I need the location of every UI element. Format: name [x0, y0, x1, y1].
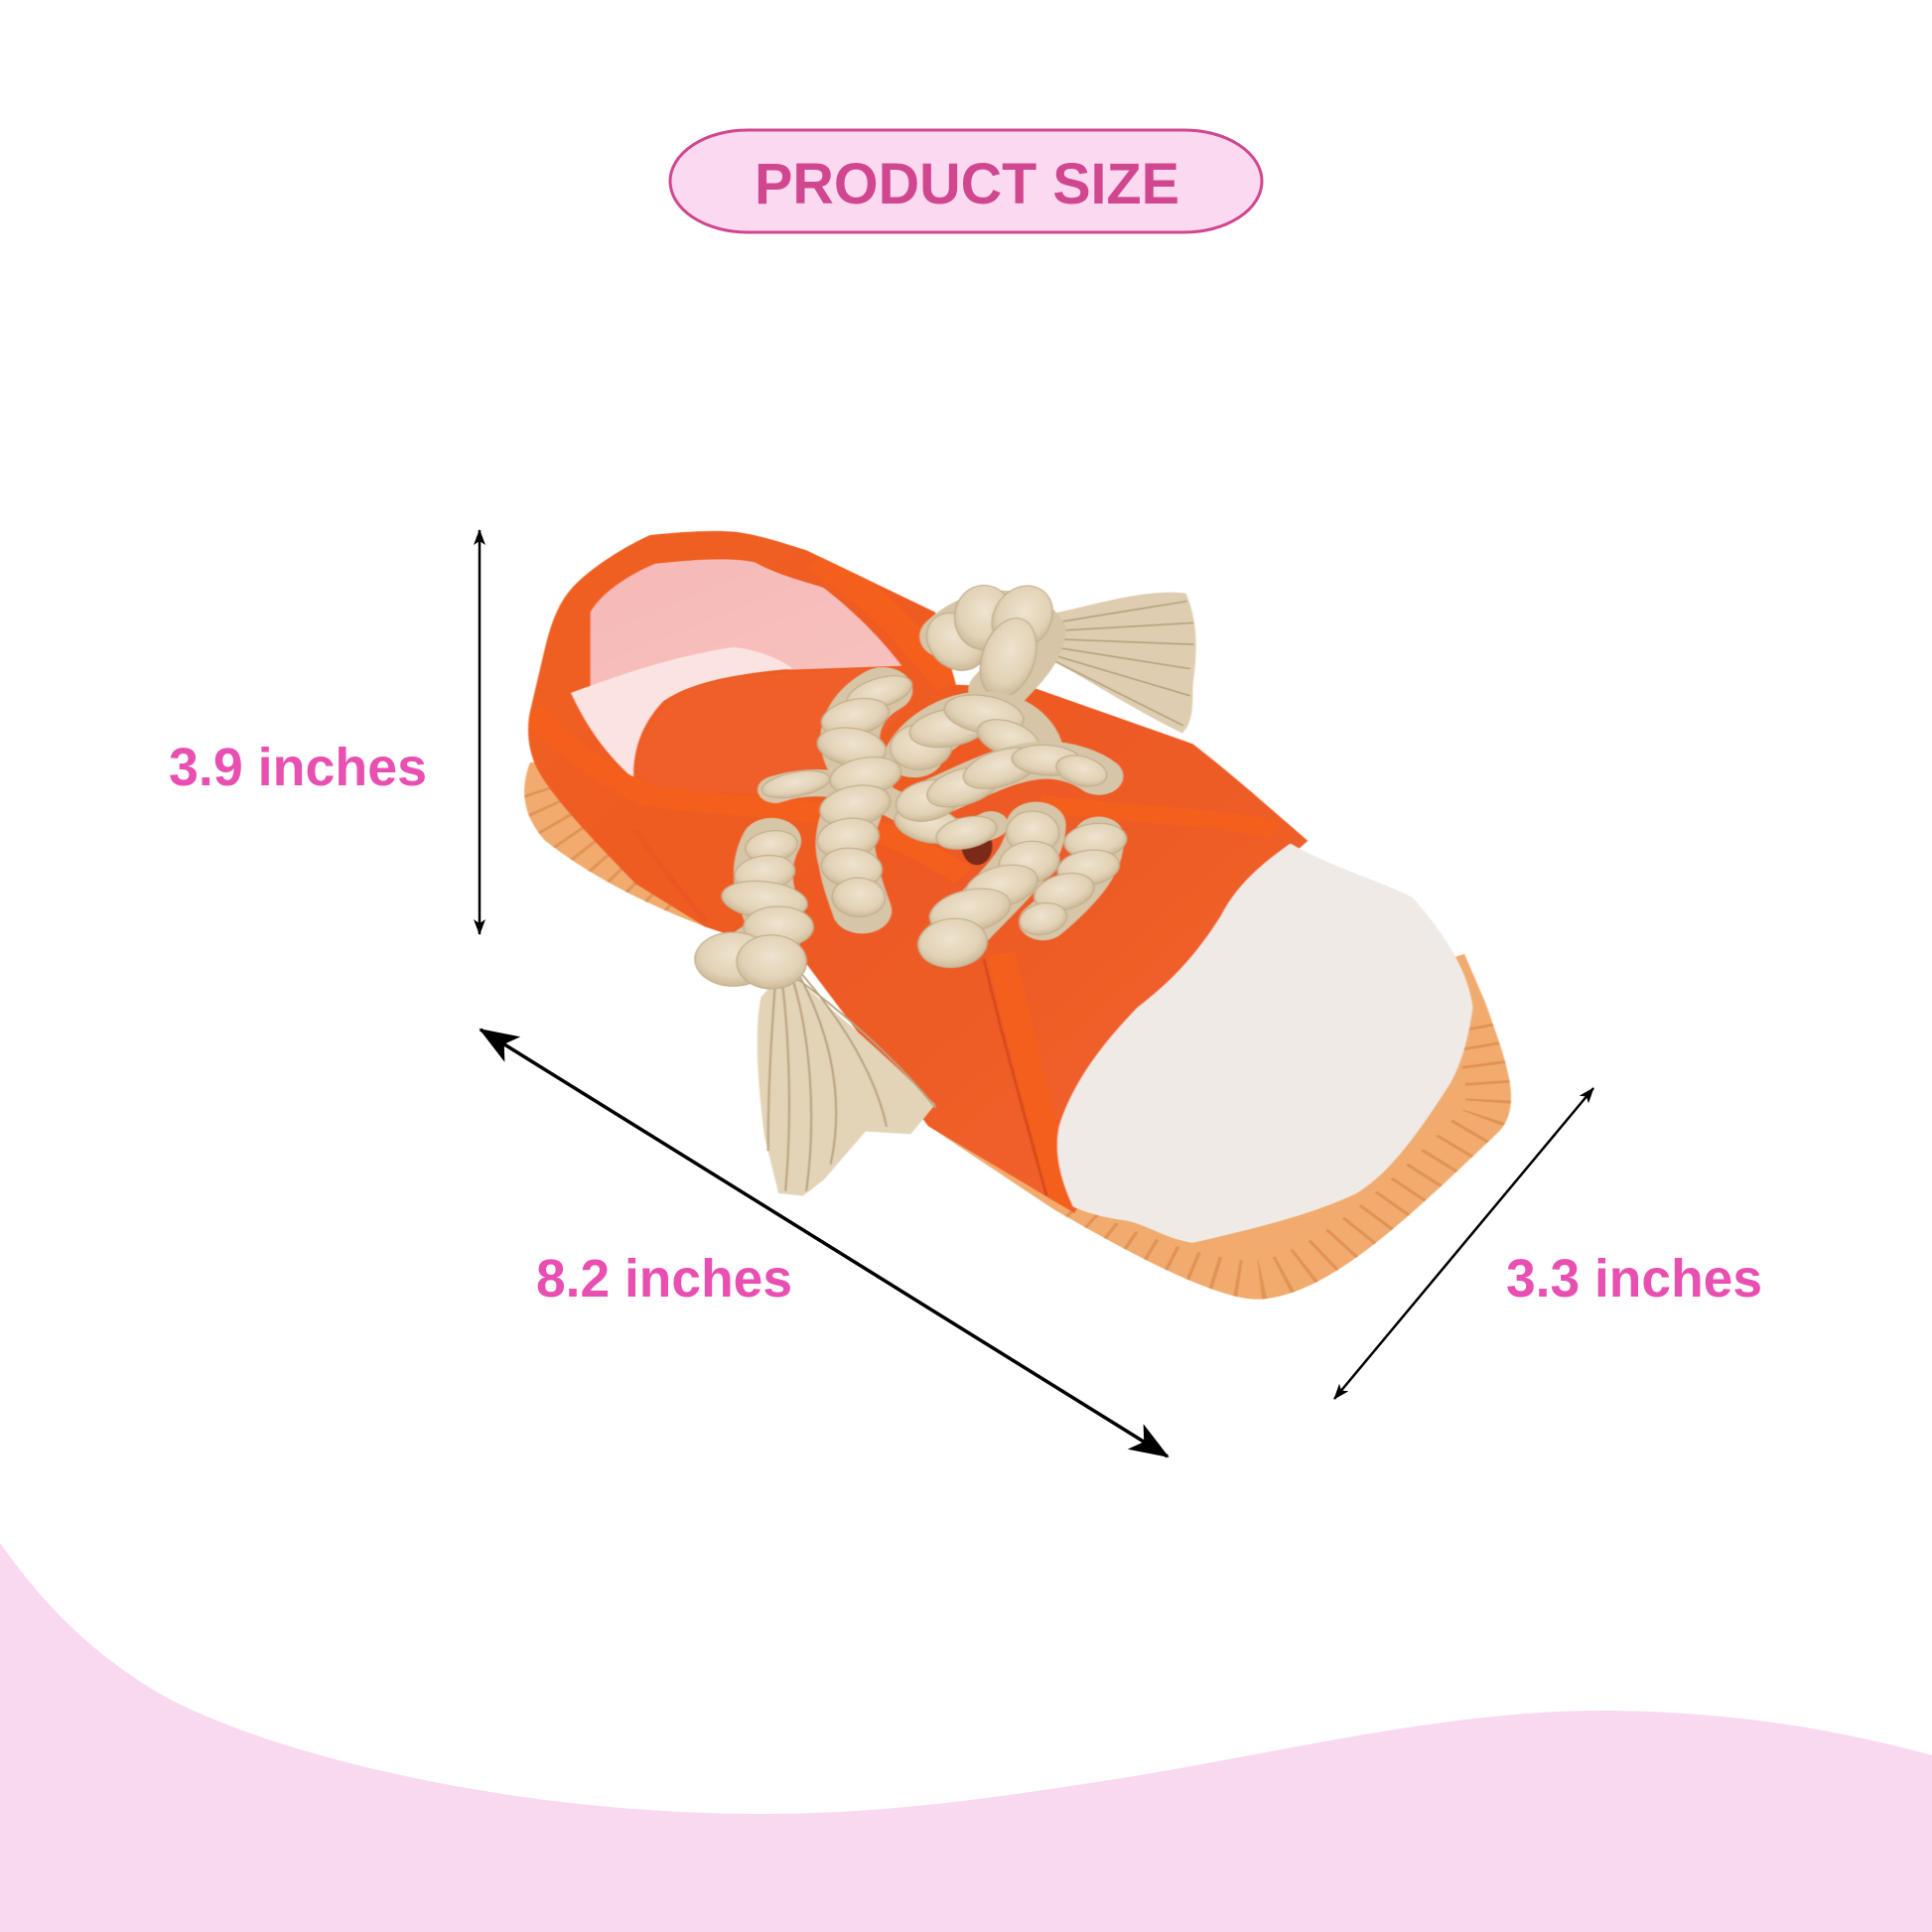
rope crossing lower [888, 740, 1113, 829]
lower left tassel [758, 970, 935, 1196]
shoe bindings [531, 561, 1277, 1206]
right rope pair [909, 811, 1130, 975]
label: length: 8.2 inches [536, 1249, 792, 1309]
width arrow [1334, 1088, 1593, 1399]
vertical rope [810, 669, 918, 921]
title pill [670, 130, 1262, 232]
shoe sole front [928, 954, 1511, 1300]
rope crossing upper [880, 689, 1047, 778]
top tassel [1046, 593, 1196, 733]
collar lining [591, 559, 901, 687]
shoe sole heel [523, 761, 706, 927]
shoe upper [528, 531, 1308, 1213]
height arrow [479, 530, 481, 934]
title text: PRODUCT SIZE [755, 152, 1179, 216]
insole [571, 647, 792, 779]
length arrow [481, 1030, 1168, 1456]
lace hole [962, 827, 992, 865]
background wave [0, 1543, 1932, 1932]
tongue [635, 667, 914, 798]
top knot [916, 581, 1061, 702]
lower left rope and knot [695, 826, 813, 989]
product photo: orange canvas shoe toy [524, 531, 1511, 1300]
lower rope strand [759, 765, 1003, 855]
toe cap [1057, 844, 1473, 1243]
label: width: 3.3 inches [1506, 1249, 1762, 1309]
label: height: 3.9 inches [169, 738, 427, 797]
